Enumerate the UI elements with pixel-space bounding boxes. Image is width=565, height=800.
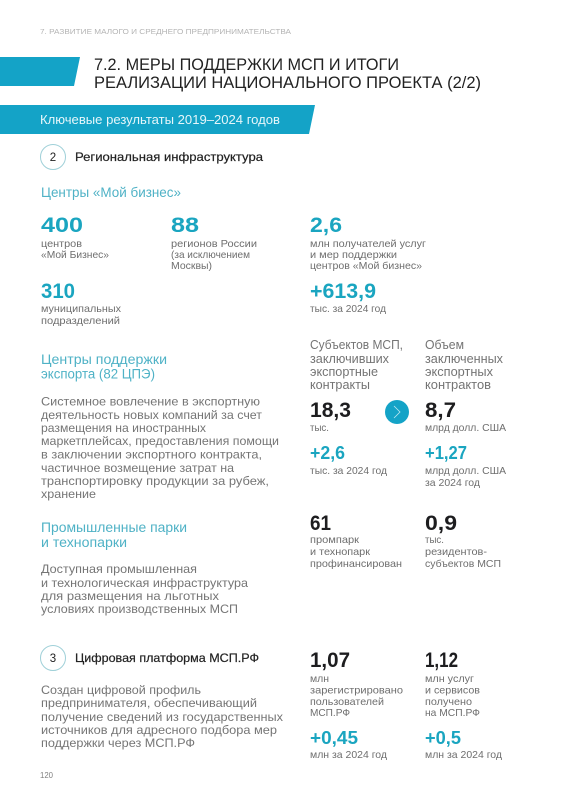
title (94, 56, 481, 92)
column heading: SMEs with export contracts: контракты (310, 377, 370, 392)
export support description (41, 394, 279, 501)
stat: 8,7 billion USD: 8,7 (425, 399, 456, 422)
stat: 0,9 thousand residents: тыс. (425, 535, 444, 546)
stat: 1,07 million users: 1,07 (310, 649, 350, 672)
stat: +1,27 billion USD: за 2024 год (425, 478, 480, 489)
industrial parks description: и технологическая инфраструктура (41, 576, 248, 590)
stat: 61 parks financed: профинансирован (310, 558, 402, 570)
stat: +0,45 million: млн за 2024 год (310, 750, 387, 761)
section 2 heading: Региональная инфраструктура (75, 150, 263, 164)
stat: +0,5 million: +0,5 (425, 728, 461, 748)
stat: 1,12 million services (425, 649, 480, 719)
stat: +613,9 thousand: тыс. за 2024 год (310, 304, 386, 315)
heading: industrial parks: Промышленные парки (41, 520, 187, 535)
section 3 heading: 3 (50, 653, 56, 665)
stat: 1,07 million users: млн (310, 674, 329, 685)
stat: 1,12 million services: 1,12 (425, 649, 458, 672)
stat: 88 regions: (за исключением (171, 250, 250, 261)
stat: +613,9 thousand (310, 280, 386, 315)
stat: 18,3 thousand (310, 399, 351, 434)
column heading: SMEs with export contracts: заключивших (310, 351, 389, 366)
export support description: размещения на иностранных (41, 421, 206, 435)
stat: 88 regions: регионов России (171, 239, 257, 250)
section 2 heading (40, 144, 263, 170)
export support description: в заключении экспортного контракта, (41, 448, 262, 462)
stat: 0,9 thousand residents: 0,9 (425, 512, 457, 535)
icon: arrow circle (385, 400, 409, 424)
page number: 120 (40, 770, 53, 780)
stat: +1,27 billion USD: +1,27 (425, 443, 467, 463)
heading: export support centers: экспорта (82 ЦПЭ) (41, 366, 155, 382)
stat: 0,9 thousand residents: резидентов- (425, 547, 487, 558)
stat: 1,07 million users: пользователей (310, 697, 384, 708)
industrial parks description (41, 562, 248, 616)
industrial parks description: для размещения на льготных (41, 589, 219, 603)
stat: 2,6 million recipients: центров «Мой бизнес» (310, 260, 422, 272)
stat: 88 regions: Москвы) (171, 261, 212, 272)
stat: 1,07 million users: зарегистрировано (310, 686, 403, 696)
stat: +0,45 million (310, 728, 387, 761)
export support description: маркетплейсах, предоставления помощи (41, 434, 279, 448)
key results banner: Ключевые результаты 2019–2024 годов (40, 112, 280, 127)
column heading: SMEs with export contracts: Субъектов МСП, (310, 337, 403, 352)
stat: 61 parks financed: промпарк (310, 535, 360, 546)
stat: 400 centers: «Мой Бизнес» (41, 250, 109, 261)
title accent band (0, 57, 80, 86)
stat: +2,6 thousand (310, 443, 387, 477)
export support description: хранение (41, 487, 96, 501)
stat: 2,6 million recipients: млн получателей услуг (310, 239, 426, 250)
export support description: транспортировку продукции за рубеж, (41, 474, 269, 488)
stat: +2,6 thousand: тыс. за 2024 год (310, 466, 387, 477)
stat: 18,3 thousand: 18,3 (310, 399, 351, 422)
stat: 1,07 million users (310, 649, 403, 719)
stat: 310 municipal units: муниципальных (41, 304, 121, 315)
section 3 heading: Цифровая платформа МСП.РФ (75, 651, 259, 665)
section 2 heading: 2 (50, 152, 56, 164)
stat: 61 parks financed: и технопарк (310, 547, 371, 558)
heading: industrial parks (41, 520, 187, 550)
stat: 310 municipal units: 310 (41, 280, 75, 303)
stat: +0,5 million (425, 728, 502, 761)
export support description: частичное возмещение затрат на (41, 461, 234, 475)
section 3 heading (40, 646, 259, 670)
column heading: export contract volume (425, 337, 503, 392)
digital platform description: Создан цифровой профиль (41, 683, 201, 697)
stat: 400 centers (41, 214, 109, 261)
stat: 0,9 thousand residents: субъектов МСП (425, 558, 501, 570)
stat: 61 parks financed: 61 (310, 512, 331, 535)
export support description: деятельность новых компаний за счет (41, 408, 263, 422)
stat: +613,9 thousand: +613,9 (310, 280, 376, 303)
export support description: Системное вовлечение в экспортную (41, 394, 260, 408)
stat: 1,07 million users: МСП.РФ (310, 708, 350, 719)
stat: 2,6 million recipients (310, 214, 426, 272)
digital platform description: поддержки через МСП.РФ (41, 736, 195, 750)
column heading: export contract volume: Объем (425, 337, 464, 352)
stat: 61 parks financed (310, 512, 402, 570)
key results banner (0, 105, 315, 134)
digital platform description: источников для адресного подбора мер (41, 723, 277, 737)
title: РЕАЛИЗАЦИИ НАЦИОНАЛЬНОГО ПРОЕКТА (2/2) (94, 74, 481, 92)
stat: 0,9 thousand residents (425, 512, 501, 570)
stat: 400 centers: центров (41, 239, 82, 250)
stat: +2,6 thousand: +2,6 (310, 443, 345, 463)
industrial parks description: Доступная промышленная (41, 562, 197, 576)
heading: export support centers (41, 352, 167, 382)
stat: +0,45 million: +0,45 (310, 728, 358, 748)
digital platform description: получение сведений из государственных (41, 710, 283, 724)
stat: +1,27 billion USD: млрд долл. США (425, 466, 506, 477)
stat: 88 regions (171, 214, 257, 272)
stat: 400 centers: 400 (41, 214, 83, 237)
stat: 310 municipal units (41, 280, 121, 327)
title: 7.2. МЕРЫ ПОДДЕРЖКИ МСП И ИТОГИ (94, 56, 399, 74)
stat: +0,5 million: млн за 2024 год (425, 750, 502, 761)
digital platform description: предпринимателя, обеспечивающий (41, 696, 257, 710)
heading: my business centers: Центры «Мой бизнес» (41, 185, 181, 200)
industrial parks description: условиях производственных МСП (41, 602, 238, 616)
stat: 8,7 billion USD: млрд долл. США (425, 423, 506, 434)
stat: 88 regions: 88 (171, 214, 199, 237)
heading: industrial parks: и технопарки (41, 535, 127, 550)
column heading: export contract volume: экспортных (425, 364, 493, 379)
stat: +1,27 billion USD (425, 443, 506, 489)
stat: 18,3 thousand: тыс. (310, 423, 329, 434)
heading: export support centers: Центры поддержки (41, 352, 167, 367)
stat: 2,6 million recipients: 2,6 (310, 214, 342, 237)
running header: 7. РАЗВИТИЕ МАЛОГО И СРЕДНЕГО ПРЕДПРИНИМАТЕЛЬСТВА (40, 29, 291, 36)
stat: 2,6 million recipients: и мер поддержки (310, 250, 397, 261)
stat: 1,12 million services: млн услуг (425, 674, 474, 685)
digital platform description (41, 683, 283, 750)
column heading: export contract volume: заключенных (425, 351, 503, 366)
stat: 1,12 million services: и сервисов (425, 686, 480, 696)
column heading: SMEs with export contracts: экспортные (310, 364, 378, 379)
stat: 1,12 million services: получено (425, 697, 472, 708)
column heading: SMEs with export contracts (310, 337, 403, 392)
stat: 8,7 billion USD (425, 399, 506, 434)
column heading: export contract volume: контрактов (425, 377, 491, 392)
stat: 1,12 million services: на МСП.РФ (425, 708, 480, 719)
stat: 310 municipal units: подразделений (41, 316, 120, 327)
